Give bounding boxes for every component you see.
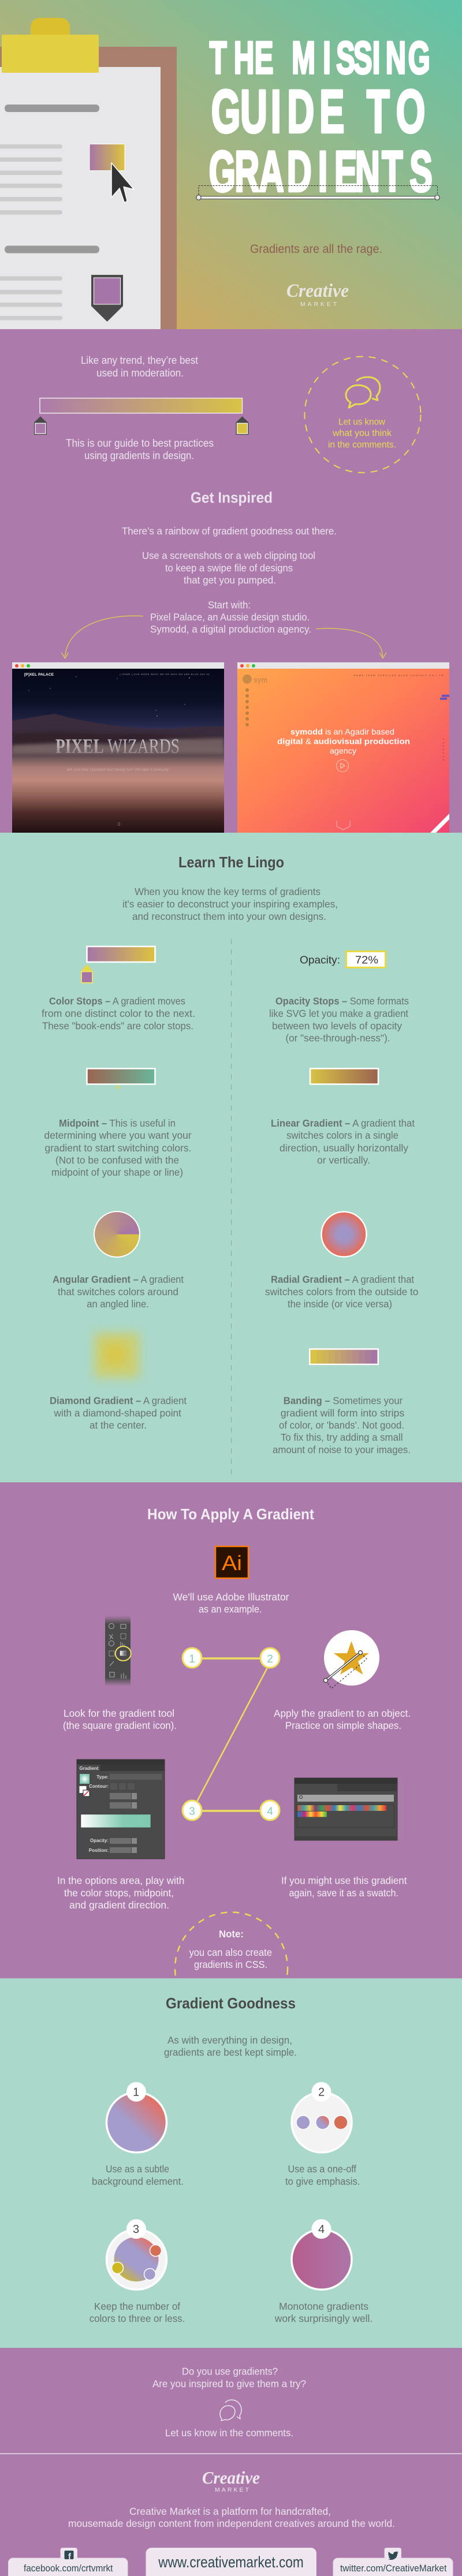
comments text: Let us know in the comments. — [165, 2427, 293, 2439]
connector lines — [197, 1658, 267, 1811]
step 4 text — [281, 1875, 407, 1899]
callout: comments: in the comments. — [328, 440, 396, 450]
heading: Learn The Lingo: Learn The Lingo — [178, 853, 284, 871]
diamond text — [50, 1395, 187, 1431]
subtitle: Gradients are all the rage. — [250, 243, 382, 256]
screenshot: Pixel Palace: 0 — [118, 822, 121, 827]
illustration: gradient panel: Type: — [96, 1775, 109, 1780]
question text: Are you inspired to give them a try? — [152, 2378, 306, 2389]
step 3 text: In the options area, play with — [57, 1875, 184, 1887]
diamond text: Diamond Gradient – A gradient — [50, 1395, 187, 1407]
link: website: www.creativemarket.com — [158, 2553, 304, 2571]
radial text: switches colors from the outside to — [265, 1286, 418, 1298]
step 3 text: the color stops, midpoint, — [64, 1887, 174, 1899]
screenshot: Symodd: symodd is an Agadir based — [290, 727, 394, 736]
illustrator text — [173, 1591, 289, 1615]
panel: how to apply — [58, 1508, 410, 1976]
body text: inspiration: Pixel Palace, an Aussie design studio. — [150, 611, 310, 622]
step 3 badge: 3 — [189, 1806, 195, 1818]
screenshot: Pixel Palace: PIXEL WIZARDS — [55, 735, 180, 758]
angular text: Angular Gradient – A gradient — [53, 1274, 184, 1285]
step 3 badge — [182, 1800, 202, 1820]
angular text: that switches colors around — [58, 1286, 178, 1298]
screenshot: Symodd — [237, 662, 449, 833]
tip 2: to give emphasis. — [285, 2176, 360, 2187]
step 4 badge — [260, 1800, 280, 1820]
body text: inspiration — [122, 525, 337, 635]
body text: inspiration: Start with: — [208, 599, 251, 611]
lingo intro text — [122, 886, 338, 922]
link: twitter: twitter.com/CreativeMarket — [340, 2563, 447, 2574]
term: angular gradient — [53, 1210, 184, 1310]
step 2 badge — [260, 1648, 280, 1668]
link: facebook: f — [68, 2552, 72, 2562]
panel: intro — [12, 354, 449, 833]
tip 1: Use as a subtle — [106, 2163, 169, 2175]
intro text top: Like any trend, they’re best — [81, 354, 198, 366]
step 2 text: Practice on simple shapes. — [285, 1720, 401, 1731]
opacity stops text: like SVG let you make a gradient — [269, 1008, 408, 1019]
term: radial gradient — [265, 1211, 418, 1310]
body text: inspiration: Symodd, a digital production agency. — [150, 624, 311, 635]
color stops text: from one distinct color to the next. — [42, 1008, 195, 1019]
linear text: Linear Gradient – A gradient that — [271, 1117, 415, 1129]
banding text: amount of noise to your images. — [273, 1444, 411, 1456]
intro text bottom: This is our guide to best practices — [66, 437, 214, 449]
tip 2: Use as a one-off — [288, 2163, 356, 2175]
step 2 text — [274, 1708, 411, 1731]
about text: Creative Market is a platform for handcrafted, — [129, 2506, 331, 2517]
step 4 text: If you might use this gradient — [281, 1875, 407, 1887]
icon: Adobe Illustrator: Ai — [222, 1551, 242, 1575]
icon: Adobe Illustrator — [215, 1546, 248, 1578]
tip 4 — [274, 2219, 372, 2324]
lingo intro text: and reconstruct them into your own designs. — [132, 911, 326, 922]
color stops text: These "book-ends" are color stops. — [42, 1020, 193, 1031]
tip 3: Keep the number of — [94, 2301, 180, 2312]
midpoint diamond — [117, 1086, 119, 1089]
illustration: gradient panel — [77, 1759, 165, 1859]
illustration: gradient panel: Contour: — [89, 1784, 109, 1789]
icon: chat bubbles — [346, 377, 380, 408]
screenshot: Symodd: digital & audiovisual production — [277, 737, 410, 746]
term: midpoint — [44, 1068, 192, 1178]
step 3 text: and gradient direction. — [69, 1899, 169, 1911]
step 3 text — [57, 1875, 184, 1911]
body text: inspiration: There’s a rainbow of gradient goodness out there. — [122, 525, 337, 537]
midpoint text: gradient to start switching colors. — [45, 1142, 192, 1154]
panel: footer — [8, 2467, 453, 2576]
title: GUIDE TO — [211, 77, 425, 146]
opacity field: 72% — [355, 954, 378, 965]
screenshot: Symodd: agency — [330, 746, 356, 755]
callout: comments: Let us know — [338, 417, 385, 427]
banding text: of color, or 'bands'. Not good. — [279, 1419, 404, 1431]
banding text: Banding – Sometimes your — [284, 1395, 403, 1407]
callout: note — [174, 1911, 289, 1976]
banded bar — [309, 1348, 379, 1365]
callout: note: you can also create — [189, 1947, 272, 1958]
midpoint bar — [87, 1068, 155, 1084]
divider line — [0, 2453, 462, 2454]
screenshot: Symodd: HOME TEAM SERVICES BLOG CONTACT EN | FR — [353, 674, 444, 677]
logo: Creative Market: MARKET — [215, 2486, 249, 2493]
heading: Gradient Goodness: Gradient Goodness — [166, 1995, 296, 2012]
screenshot: Pixel Palace: We cant play Quidditch but having fun? We take it seriously. — [66, 768, 169, 772]
callout: note: gradients in CSS. — [194, 1959, 267, 1970]
intro text top — [81, 354, 198, 379]
icon: clipboard — [0, 18, 177, 329]
goodness intro text — [164, 2034, 297, 2058]
radial text: Radial Gradient – A gradient that — [271, 1274, 414, 1285]
opacity stops text: (or "see-through-ness"). — [285, 1032, 390, 1044]
angular text — [53, 1274, 184, 1310]
panel: header — [0, 0, 462, 329]
step 1 badge — [182, 1648, 202, 1668]
color stops text: Color Stops – A gradient moves — [49, 996, 185, 1007]
step 1 text — [63, 1708, 177, 1731]
heading: How To Apply A Gradient: How To Apply A Gradient — [147, 1505, 314, 1523]
tip 3 — [90, 2219, 185, 2324]
title — [209, 32, 433, 204]
tip 1 — [92, 2082, 184, 2187]
intro text top: used in moderation. — [96, 367, 184, 379]
icon: chat bubbles — [220, 2400, 241, 2421]
diamond text: with a diamond-shaped point — [53, 1407, 181, 1419]
tip 4: 4 — [318, 2223, 325, 2236]
linear text: switches colors in a single — [286, 1129, 398, 1141]
callout: comments: what you think — [332, 428, 392, 438]
logo: Creative Market: Creative — [202, 2467, 260, 2488]
body text: inspiration: to keep a swipe file of designs — [165, 562, 293, 573]
opacity stops text: between two levels of opacity — [272, 1020, 402, 1031]
illustration: gradient panel: Position: — [89, 1848, 109, 1853]
term: linear gradient — [271, 1068, 415, 1166]
lingo intro text: it's easier to deconstruct your inspiring examples, — [122, 899, 338, 910]
link: facebook: facebook.com/crtvmrkt — [24, 2563, 113, 2574]
step 4 text: again, save it as a swatch. — [289, 1887, 398, 1899]
about text — [68, 2506, 395, 2529]
term: diamond gradient — [50, 1333, 187, 1431]
banding text: To fix this, try adding a small — [281, 1431, 403, 1443]
goodness intro text: gradients are best kept simple. — [164, 2046, 297, 2058]
tip 3: 3 — [133, 2223, 139, 2236]
gradient swatch — [90, 144, 125, 171]
banding text — [273, 1395, 411, 1456]
about text: mousemade design content from independent creatives around the world. — [68, 2518, 395, 2529]
icon: color stop — [91, 275, 123, 322]
step 1 badge: 1 — [189, 1653, 195, 1665]
radial text — [265, 1274, 418, 1310]
illustration: toolbar — [105, 1616, 131, 1686]
opacity field: Opacity: — [300, 954, 340, 965]
question text: Do you use gradients? — [182, 2366, 278, 2377]
step 2 badge: 2 — [267, 1653, 273, 1665]
title: THE MISSING — [210, 32, 430, 83]
banding text: gradient will form into strips — [281, 1407, 404, 1419]
step 4 badge: 4 — [267, 1806, 273, 1818]
tip 4: Monotone gradients — [279, 2301, 368, 2312]
color stops text — [42, 996, 195, 1031]
color stop marker — [81, 964, 93, 983]
tip 2: 2 — [318, 2086, 325, 2098]
screenshot: Pixel Palace: [P]XEL PALACE — [24, 673, 54, 677]
link: website — [146, 2548, 316, 2576]
icon: cursor — [111, 163, 134, 202]
illustrator text: as an example. — [199, 1604, 262, 1615]
midpoint text: midpoint of your shape or line) — [51, 1166, 183, 1178]
opacity stops text — [269, 996, 409, 1044]
linear text: direction, usually horizontally — [280, 1142, 408, 1154]
screenshot: Symodd: sym — [254, 675, 267, 684]
linear text: or vertically. — [317, 1154, 370, 1166]
step 1 text: Look for the gradient tool — [64, 1708, 174, 1719]
illustration: star with gradient line — [323, 1630, 379, 1688]
intro text bottom — [66, 437, 214, 461]
gradient handle line — [196, 186, 439, 200]
link: twitter — [333, 2548, 453, 2576]
goodness intro text: As with everything in design, — [167, 2034, 292, 2046]
illustration: gradient panel: Opacity: — [90, 1838, 109, 1843]
step 1 text: (the square gradient icon). — [63, 1720, 177, 1731]
logo: Creative Market: MARKET — [300, 301, 337, 308]
midpoint text — [44, 1117, 192, 1178]
diamond text: at the center. — [90, 1419, 147, 1431]
midpoint text: (Not to be confused with the — [55, 1154, 179, 1166]
opacity field — [300, 952, 386, 968]
term: color stops — [42, 946, 195, 1031]
intro text bottom: using gradients in design. — [84, 449, 194, 461]
tip 3: colors to three or less. — [90, 2313, 185, 2324]
panel: learn the lingo — [42, 853, 418, 1479]
lingo intro text: When you know the key terms of gradients — [135, 886, 321, 897]
angular text: an angled line. — [87, 1298, 149, 1310]
arrow: to Pixel Palace — [61, 616, 143, 658]
panel: gradient goodness — [90, 1995, 372, 2324]
panel: call to action — [152, 2366, 306, 2439]
tip 1: background element. — [92, 2176, 184, 2187]
step 2 text: Apply the gradient to an object. — [274, 1708, 411, 1719]
gradient bar with stops — [34, 398, 248, 435]
question text — [152, 2366, 306, 2389]
diamond blur — [94, 1333, 139, 1378]
title: GRADIENTS — [209, 140, 433, 204]
illustrator text: We'll use Adobe Illustrator — [173, 1591, 289, 1603]
illustration: gradient panel: Gradient — [80, 1766, 99, 1771]
screenshot: Pixel Palace: [ HOME ] OUR WORK WHAT WE DO WHO WE ARE BLOG SAY HI — [120, 673, 209, 676]
body text: inspiration: Use a screenshots or a web clipping tool — [142, 550, 315, 561]
screenshot: Pixel Palace — [12, 662, 224, 833]
tip 4: work surprisingly well. — [274, 2313, 372, 2324]
opacity stops text: Opacity Stops – Some formats — [275, 996, 409, 1007]
midpoint text: determining where you want your — [44, 1129, 192, 1141]
angular circle — [94, 1210, 141, 1258]
logo: Creative Market: Creative — [286, 281, 349, 301]
radial circle — [321, 1211, 366, 1257]
callout: note: Note: — [219, 1928, 244, 1940]
term: opacity stops — [269, 952, 409, 1044]
tip 1: 1 — [133, 2086, 139, 2098]
illustration: swatches panel — [295, 1778, 397, 1840]
radial text: the inside (or vice versa) — [288, 1298, 392, 1310]
link: facebook — [8, 2548, 128, 2576]
body text: inspiration: that get you pumped. — [184, 575, 276, 586]
arrow: to Symodd — [316, 628, 386, 658]
tip 2 — [285, 2082, 360, 2187]
callout: comments — [305, 357, 420, 472]
heading: Get Inspired: Get Inspired — [191, 489, 273, 506]
linear text — [271, 1117, 415, 1166]
midpoint text: Midpoint – This is useful in — [59, 1117, 176, 1129]
linear bar — [310, 1068, 378, 1084]
color stops bar — [87, 946, 155, 962]
term: banding — [273, 1348, 411, 1456]
